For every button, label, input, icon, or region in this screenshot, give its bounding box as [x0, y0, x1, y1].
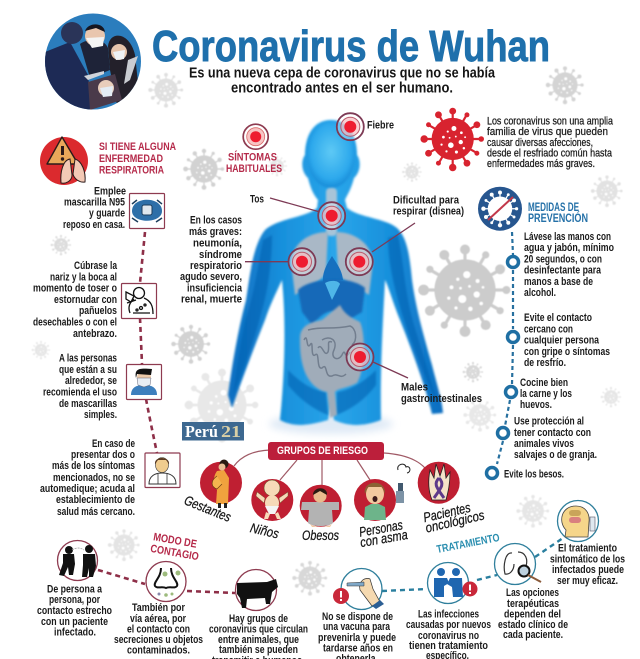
text: airborne: el contacto con: [127, 624, 190, 636]
icon: person to person: [58, 540, 98, 580]
blue human body: [228, 120, 443, 434]
text: mascarilla N95: mascarilla N95: [64, 196, 125, 208]
text: symptomatic treatment: [550, 542, 625, 587]
text: people around you: A las personas: [59, 352, 117, 364]
dashed connector: treatment: [382, 538, 563, 591]
text: wash hands: agua y jabón, mínimo: [524, 242, 614, 254]
heading: tratamiento: TRATAMIENTO: [436, 532, 501, 556]
heading: modo de contagio: [149, 531, 200, 563]
text: see a doctor: presentar dos o: [71, 449, 135, 461]
heading: medidas de prevencion: PREVENCIÓN: [528, 212, 588, 225]
label: obesos: Obesos: [302, 528, 339, 543]
text: cover nose and mouth: momento de toser o: [33, 282, 117, 294]
text: no specific treatment: [406, 608, 491, 659]
icon: N95 mask: [130, 194, 164, 228]
text: people around you: alrededor, se: [65, 375, 117, 387]
icon: target: [243, 124, 268, 149]
heading: sintomas habituales: SÍNTOMAS: [228, 150, 277, 164]
text: cover nose and mouth: pañuelos: [79, 305, 117, 317]
label: personas con asma: [358, 517, 409, 550]
icon: cow: [236, 570, 278, 610]
arm muscles: [233, 235, 438, 415]
label: males gastrointestinales: Males: [401, 382, 428, 394]
text: person to person: persona, por: [49, 594, 100, 606]
text: symptomatic treatment: ser muy eficaz.: [557, 575, 618, 587]
text: severe cases: respiratorio: [190, 260, 242, 272]
text: no specific treatment: coronavirus no: [418, 630, 479, 642]
text: therapeutic options: terapéuticas: [507, 598, 559, 610]
heading: modo de contagio: CONTAGIO: [149, 543, 200, 563]
dashed connector: prevention: [497, 232, 513, 464]
text: animals: [209, 613, 308, 659]
risk group connectors: [234, 450, 425, 485]
dashed connector: contagion: [98, 570, 235, 593]
text: symptomatic treatment: infectados puede: [552, 564, 624, 576]
intestines: [300, 305, 364, 418]
text: cover nose and mouth: Cúbrase la: [74, 260, 117, 272]
label: personas con asma: Personas: [358, 517, 404, 540]
label: dificultad para respirar: [393, 194, 464, 218]
text: cover nose and mouth: antebrazo.: [73, 328, 117, 340]
label: pacientes oncologicos: Pacientes: [422, 500, 472, 525]
text: severe cases: agudo severo,: [180, 271, 242, 283]
photo: people wearing masks: [45, 13, 141, 110]
text: symptomatic treatment: El tratamiento: [558, 542, 617, 554]
symptom markers: [288, 113, 374, 370]
text: see a doctor: mencionados, no se: [53, 472, 135, 484]
text: severe cases: síndrome: [199, 249, 242, 261]
label: ninos: Niños: [249, 520, 281, 541]
heading: sintomas habituales: HABITUALES: [226, 163, 282, 175]
text: no vaccine: prevenirla y puede: [318, 632, 396, 644]
text: mascarilla N95: Emplee: [94, 186, 126, 198]
text: animal contact: tener contacto con: [514, 427, 591, 439]
text: airborne: secreciones u objetos: [114, 634, 203, 646]
icon: patients: [428, 562, 478, 604]
text: person to person: [37, 584, 112, 638]
text: wash hands: Lávese las manos con: [524, 231, 611, 243]
risk group: personas con asma: [354, 464, 410, 521]
label: males gastrointestinales: [401, 382, 482, 405]
label: personas con asma: con asma: [359, 527, 409, 550]
icon: head with pills: [558, 500, 598, 542]
risk group: gestantes: [200, 460, 242, 508]
lungs: [291, 232, 328, 295]
text: people around you: de mascarillas: [59, 398, 117, 410]
heart and diaphragm: [323, 256, 343, 282]
text: people around you: simples.: [84, 409, 117, 421]
text: therapeutic options: dependen del: [504, 608, 561, 620]
heading: medidas de prevencion: MEDIDAS DE: [528, 202, 579, 214]
icon: nose droplets: [146, 562, 186, 602]
risk group: ninos: [251, 479, 293, 521]
text: mascarilla N95: [63, 186, 126, 231]
throat: [326, 188, 337, 236]
logo: Peru21: 21: [221, 422, 241, 441]
head highlight: [307, 122, 355, 188]
logo: Peru21: [182, 422, 244, 441]
text: airborne: También por: [132, 602, 185, 614]
icon: person coughing: [122, 284, 156, 318]
icon: man with mask: [126, 364, 162, 400]
heading: modo de contagio: MODO DE: [152, 531, 198, 551]
text: wash hands: desinfectante para: [524, 264, 601, 276]
text: severe cases: [180, 214, 242, 306]
risk group: pacientes oncologicos: [418, 462, 460, 504]
text: see a doctor: [40, 438, 135, 518]
text: avoid close contact: de resfrío.: [524, 357, 566, 369]
label: gestantes: Gestantes: [182, 493, 233, 525]
text: therapeutic options: cada paciente.: [503, 629, 563, 641]
text: animal contact: animales vivos: [514, 438, 574, 450]
text: about coronaviruses: familia de virus que pueden: [487, 126, 608, 138]
text: people around you: [43, 352, 117, 421]
text: cook food: la carne y los: [520, 388, 572, 400]
label: fiebre: Fiebre: [367, 120, 394, 132]
text: mascarilla N95: reposo en casa.: [63, 219, 125, 231]
heading: si tiene alguna enfermedad respiratoria: RESPIRATORIA: [99, 164, 164, 176]
heading: grupos de riesgo: [268, 442, 384, 460]
label: dificultad para respirar: respirar (disnea): [393, 206, 464, 218]
text: no vaccine: tardarse años en: [323, 642, 393, 654]
text: wash hands: alcohol.: [524, 287, 556, 299]
risk group: obesos: [300, 485, 342, 527]
text: cook food: huevos.: [520, 399, 552, 411]
text: wash hands: manos a base de: [524, 276, 593, 288]
heading: medidas de prevencion: [528, 202, 588, 225]
connector lines to symptoms: [245, 198, 415, 378]
text: people around you: que están a su: [59, 364, 117, 376]
text: animal contact: salvajes o de granja.: [514, 449, 597, 461]
text: no specific treatment: Las infecciones: [418, 608, 479, 620]
text: no specific treatment: tienen tratamiento: [409, 640, 488, 652]
text: animals: también se pueden: [219, 644, 298, 656]
text: animal contact: [514, 416, 597, 461]
text: person to person: infectado.: [54, 626, 96, 638]
text: avoid close contact: cualquier persona: [524, 334, 599, 346]
text: about coronaviruses: desde el resfriado común hasta: [487, 148, 612, 160]
text: no vaccine: [318, 611, 396, 659]
label: males gastrointestinales: gastrointestinales: [401, 393, 482, 405]
text: person to person: De persona a: [47, 584, 102, 596]
heading: si tiene alguna enfermedad respiratoria: [99, 141, 176, 176]
text: no vaccine: No se dispone de: [322, 611, 393, 623]
text: no specific treatment: causadas por nuevos: [406, 619, 491, 631]
prevention bullets: [486, 256, 518, 478]
text: airborne: contaminados.: [127, 644, 190, 656]
text: see a doctor: más de los síntomas: [52, 460, 135, 472]
heading: sintomas habituales: [226, 150, 282, 175]
text: avoid close contact: cercano con: [524, 324, 573, 336]
text: see a doctor: establecimiento de: [56, 494, 135, 506]
text: avoid close contact: Evite el contacto: [524, 312, 592, 324]
icon: vaccine hand: [333, 568, 384, 610]
text: about coronaviruses: enfermedades más graves.: [487, 158, 595, 170]
text: cover nose and mouth: nariz y la boca al: [50, 272, 117, 284]
heading: si tiene alguna enfermedad respiratoria: ENFERMEDAD: [99, 153, 163, 165]
text: animals: Hay grupos de: [229, 613, 288, 625]
text: severe cases: En los casos: [190, 214, 242, 226]
icon: doctor: [145, 453, 180, 488]
text: animal contact: Use protección al: [514, 416, 584, 428]
text: cover nose and mouth: estornudar con: [54, 294, 117, 306]
heading: grupos de riesgo: GRUPOS DE RIESGO: [277, 445, 368, 457]
text: wash hands: 20 segundos, o con: [524, 254, 602, 266]
text: see a doctor: salud más cercano.: [57, 506, 135, 518]
icon: warning with lungs: [40, 137, 88, 185]
subtitle: encontrado antes en el ser humano.: [231, 80, 453, 96]
icon: prevention crossed virus: [478, 187, 522, 231]
text: airborne: [114, 602, 203, 656]
text: cover nose and mouth: [33, 260, 117, 340]
text: severe cases: insuficiencia: [187, 282, 242, 294]
text: about coronaviruses: Los coronavirus son una amplia: [487, 116, 613, 128]
text: cook food: Cocine bien: [520, 377, 568, 389]
subtitle: Es una nueva cepa de coronavirus que no se había: [189, 64, 496, 82]
label: dificultad para respirar: Dificultad para: [393, 194, 459, 206]
text: see a doctor: En caso de: [92, 438, 135, 450]
text: no vaccine: una vacuna para: [323, 621, 390, 633]
text: severe cases: neumonía,: [193, 238, 242, 250]
text: person to person: contacto estrecho: [37, 605, 112, 617]
icon: lungs magnifier: [494, 544, 541, 584]
text: about coronaviruses: [487, 116, 613, 170]
text: see a doctor: automedique; acuda al: [40, 483, 135, 495]
icon: red virus: [420, 108, 484, 171]
text: wash hands: [524, 231, 614, 299]
text: animals: coronavirus que circulan: [209, 624, 308, 636]
label: tos: Tos: [250, 194, 264, 206]
text: mascarilla N95: y guarde: [89, 208, 125, 220]
text: therapeutic options: estado clínico de: [498, 619, 568, 631]
text: person to person: con un paciente: [41, 616, 108, 628]
logo: Peru21: Perú: [185, 422, 218, 441]
text: therapeutic options: [498, 587, 568, 641]
dashed connector: respiratory tips: [140, 232, 157, 453]
title: Coronavirus de Wuhan: [152, 22, 550, 71]
background virus decorations: [32, 66, 623, 596]
text: about coronaviruses: causar diversas afecciones,: [487, 137, 593, 149]
text: therapeutic options: Las opciones: [506, 587, 559, 599]
text: cook food: [520, 377, 572, 411]
text: avoid close contact: con gripe o síntomas: [524, 346, 610, 358]
subtitle: [189, 64, 496, 96]
text: severe cases: renal, muerte: [181, 294, 242, 306]
text: avoid kisses: Evite los besos.: [504, 468, 564, 480]
text: animals: entre animales, que: [218, 634, 299, 646]
label: pacientes oncologicos: oncológicos: [424, 507, 486, 536]
text: severe cases: más graves:: [189, 226, 242, 238]
text: avoid close contact: [524, 312, 610, 369]
text: airborne: vía aérea, por: [130, 613, 186, 625]
heading: si tiene alguna enfermedad respiratoria: SI TIENE ALGUNA: [99, 141, 176, 153]
text: cover nose and mouth: desechables o con el: [33, 316, 117, 328]
text: people around you: recomienda el uso: [43, 386, 117, 398]
